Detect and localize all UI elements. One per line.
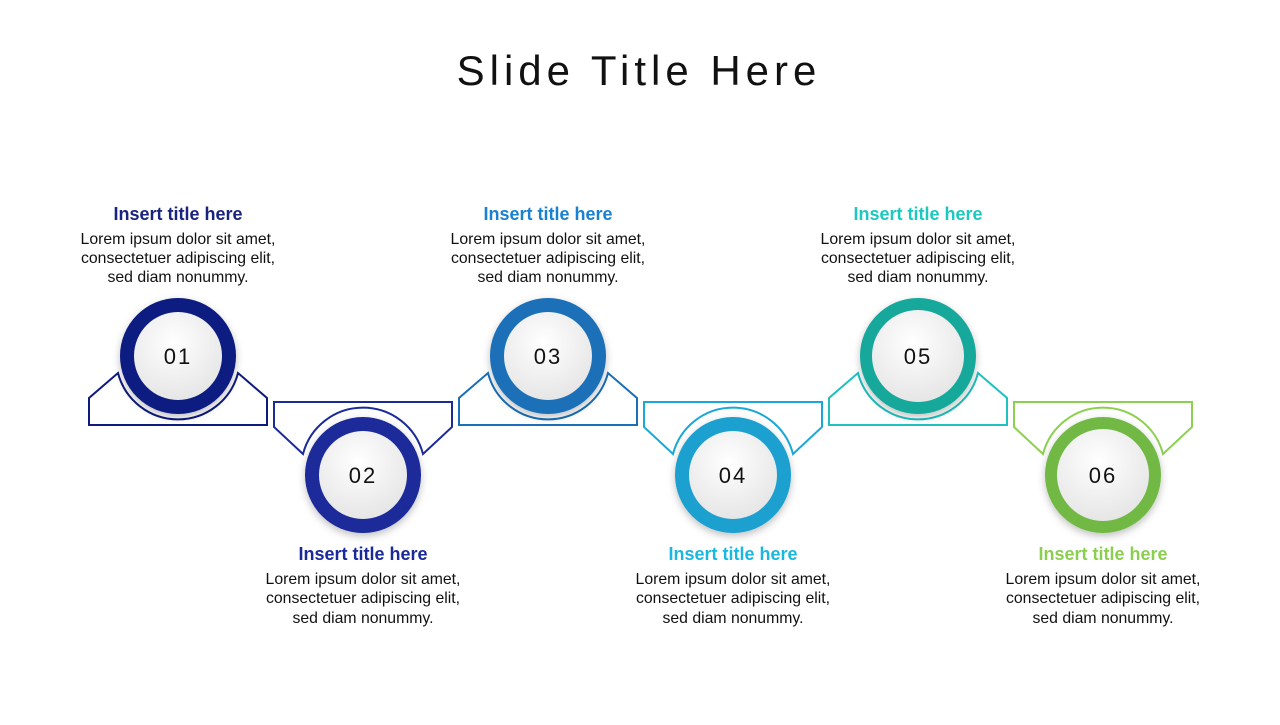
step 01: 01 [164, 344, 192, 369]
step 02: Insert title here [298, 544, 428, 564]
step 02 [266, 402, 460, 627]
step 01: consectetuer adipiscing elit, [81, 250, 275, 267]
step 05: sed diam nonummy. [847, 269, 989, 286]
step 04: Insert title here [668, 544, 798, 564]
step 05: 05 [904, 344, 932, 369]
step 03: consectetuer adipiscing elit, [451, 250, 645, 267]
step 06: 06 [1089, 463, 1117, 488]
step 05: Lorem ipsum dolor sit amet, [821, 231, 1015, 248]
step 05: Insert title here [853, 204, 983, 224]
step 01: Insert title here [113, 204, 243, 224]
step 01: Lorem ipsum dolor sit amet, [81, 231, 275, 248]
step 06: Lorem ipsum dolor sit amet, [1006, 571, 1200, 588]
step 03: 03 [534, 344, 562, 369]
step 02: 02 [349, 463, 377, 488]
step 06: Insert title here [1038, 544, 1168, 564]
step 03: Insert title here [483, 204, 613, 224]
step 03 [451, 204, 645, 425]
step 04: 04 [719, 463, 747, 488]
step 02: consectetuer adipiscing elit, [266, 590, 460, 607]
step 04: Lorem ipsum dolor sit amet, [636, 571, 830, 588]
step 06: sed diam nonummy. [1032, 610, 1174, 627]
step 04 [636, 402, 830, 627]
step 03: sed diam nonummy. [477, 269, 619, 286]
step 04: sed diam nonummy. [662, 610, 804, 627]
step 05 [821, 204, 1015, 425]
title: Slide Title Here [457, 47, 821, 94]
step 02: sed diam nonummy. [292, 610, 434, 627]
step 06: consectetuer adipiscing elit, [1006, 590, 1200, 607]
step 01 [81, 204, 275, 425]
step 03: Lorem ipsum dolor sit amet, [451, 231, 645, 248]
step 04: consectetuer adipiscing elit, [636, 590, 830, 607]
step 05: consectetuer adipiscing elit, [821, 250, 1015, 267]
step 01: sed diam nonummy. [107, 269, 249, 286]
step 02: Lorem ipsum dolor sit amet, [266, 571, 460, 588]
step 06 [1006, 402, 1200, 627]
